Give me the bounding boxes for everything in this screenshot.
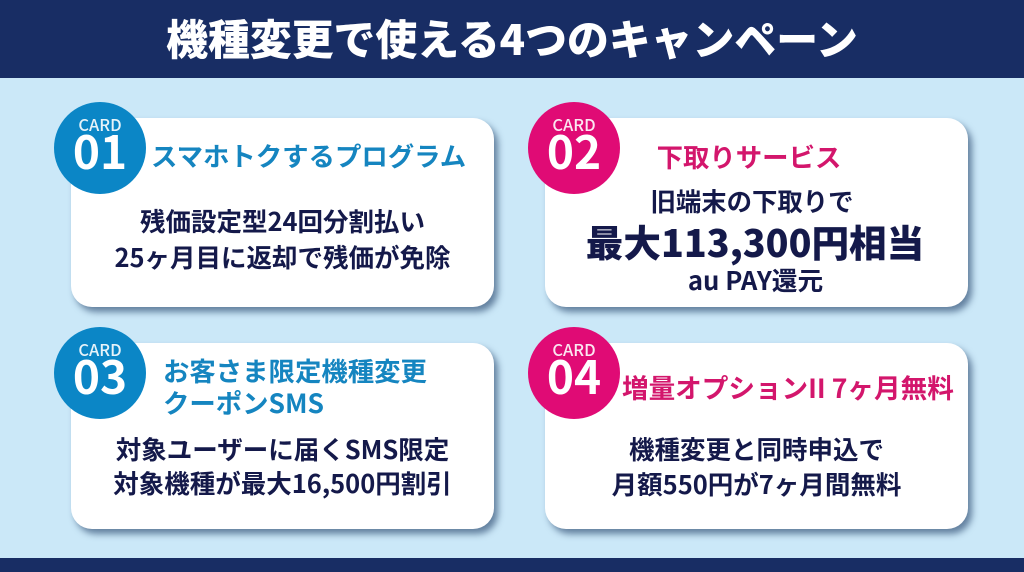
body text: card 03 (113, 430, 452, 501)
highlight: maximum value: 最大113,300円相当 (586, 213, 924, 268)
body text: card 03: 対象機種が最大16,500円割引 (113, 464, 452, 501)
body text: card 01 (114, 202, 451, 274)
badge: card 04 (528, 327, 620, 419)
badge: card 03 (54, 327, 146, 419)
heading: card 03 (163, 350, 427, 421)
badge: card 04: CARD (552, 337, 596, 361)
top title bar (0, 0, 1024, 78)
title: 機種変更で使える4つのキャンペーン (166, 7, 858, 68)
body text: card 01: 25ヶ月目に返却で残価が免除 (114, 238, 451, 274)
heading: card 01: スマホトクするプログラム (151, 135, 466, 174)
heading: card 03: お客さま限定機種変更 (163, 350, 427, 389)
body text: card 04: 機種変更と同時申込で (629, 430, 884, 466)
body text: card 04 (612, 430, 901, 502)
badge: card 04: 04 (547, 342, 601, 408)
badge: card 03: CARD (78, 337, 122, 361)
body text: card 01: 残価設定型24回分割払い (140, 202, 425, 239)
body text: card 03: 対象ユーザーに届くSMS限定 (116, 430, 449, 467)
heading: card 02: 下取りサービス (657, 136, 841, 175)
badge: card 02: CARD (552, 112, 596, 136)
heading: card 04: 増量オプションII 7ヶ月無料 (622, 367, 954, 406)
panel: card 03 (54, 327, 502, 538)
panel: card 01 (54, 102, 502, 316)
panel: card 04 (528, 327, 976, 538)
badge: card 03: 03 (73, 342, 127, 408)
body text: card 02 note: au PAY還元 (688, 261, 823, 298)
body text: card 02 intro: 旧端末の下取りで (650, 183, 854, 219)
body text: card 04: 月額550円が7ヶ月間無料 (612, 464, 901, 502)
heading: card 03: クーポンSMS (163, 382, 324, 421)
badge: card 01: CARD (78, 112, 122, 136)
bottom bar (0, 558, 1024, 572)
badge: card 02 (528, 102, 620, 194)
badge: card 02: 02 (547, 117, 601, 183)
badge: card 01: 01 (73, 117, 127, 183)
panel: card 02 (528, 102, 976, 316)
badge: card 01 (54, 102, 146, 194)
